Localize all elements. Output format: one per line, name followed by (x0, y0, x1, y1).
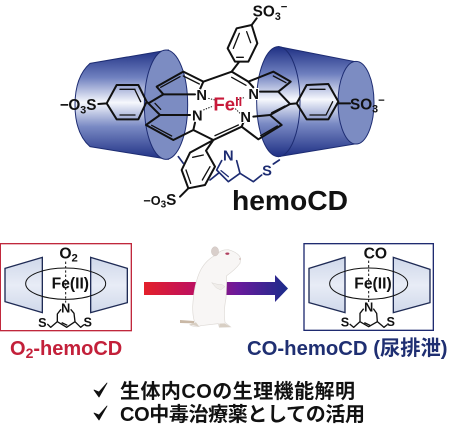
O2 label: 2 (72, 253, 78, 265)
iron label: Fe(II) (354, 276, 392, 293)
list: research outcomes (94, 380, 365, 425)
pyridine linker (47, 309, 84, 327)
sulfonate labels: 3 (161, 200, 167, 211)
linker: pyridine and sulfur: N (223, 149, 234, 165)
linker: pyridine and sulfur (178, 149, 279, 182)
porphyrin ellipse (26, 268, 106, 299)
pyridine linker (350, 309, 387, 327)
cyclodextrin trapezoids (309, 257, 430, 313)
title: hemoCD: hemoCD (232, 185, 348, 216)
arrow: gradient red to blue (144, 275, 288, 302)
icon: white rat (180, 247, 241, 327)
molecule: hemoCD structure (60, 2, 385, 211)
sulfonate labels: O (68, 97, 80, 114)
sulfonate labels: 3 (80, 104, 86, 116)
sulfonate labels: −O (143, 194, 161, 208)
cyclodextrin trapezoids (5, 257, 127, 313)
label: O2-hemoCD: -hemoCD (33, 338, 122, 360)
sulfonate labels: − (60, 97, 69, 114)
porphyrin ring (146, 72, 291, 140)
linker atoms: S (386, 315, 395, 329)
linker atoms: S (341, 315, 349, 329)
nitrogen labels (192, 87, 259, 126)
phenyl rings (98, 18, 350, 197)
cyclodextrin cone: right (257, 47, 374, 157)
linker atoms: N (61, 301, 70, 315)
sulfonate labels: 3 (372, 104, 378, 116)
nitrogen labels: N (248, 87, 259, 103)
label: O2-hemoCD: O (10, 338, 26, 360)
nitrogen labels: N (192, 109, 203, 125)
sulfonate labels: SO (350, 96, 372, 113)
check mark 2 (94, 406, 107, 420)
sulfonate labels: S (86, 97, 96, 114)
nitrogen labels: N (240, 110, 251, 126)
linker atoms (38, 301, 92, 330)
linker: pyridine and sulfur: S (262, 164, 272, 180)
linker atoms: N (364, 301, 373, 315)
text line 1: 生体内COの生理機能解明 (120, 380, 355, 403)
axial ligand bond (367, 261, 370, 302)
iron coordination bonds (203, 98, 244, 113)
O2 label: O (59, 246, 72, 263)
porphyrin ellipse (330, 268, 408, 299)
sulfonate labels: 3 (275, 11, 281, 23)
panel: CO-hemoCD (304, 244, 433, 330)
linker atoms: S (83, 315, 92, 329)
CO label: CO (364, 246, 387, 263)
iron label: Fe (213, 94, 235, 115)
nitrogen labels: N (196, 88, 207, 104)
label: O2-hemoCD: 2 (26, 345, 34, 361)
linker atoms: S (38, 316, 47, 330)
sulfonate labels: − (378, 95, 385, 107)
label: CO-hemoCD urinary excretion: CO-hemoCD (尿排泄) (247, 337, 448, 360)
sulfonate labels: − (281, 2, 288, 14)
sulfonate labels: SO (253, 4, 275, 21)
iron label: II (235, 95, 242, 109)
axial ligand bond (64, 262, 67, 303)
cyclodextrin cone: left (75, 50, 188, 159)
sulfonate labels: S (166, 192, 176, 209)
check mark 1 (94, 383, 107, 397)
linker atoms (341, 301, 395, 329)
iron label: Fe(II) (52, 276, 89, 293)
sulfonate labels (60, 2, 385, 211)
panel: O2-hemoCD (0, 244, 131, 331)
